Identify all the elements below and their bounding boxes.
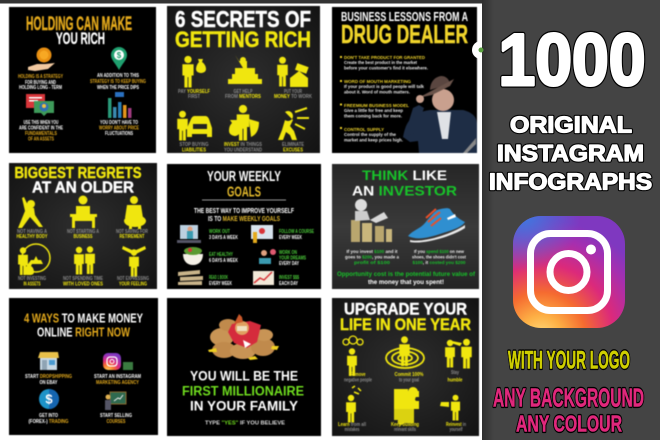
labels: upgrade bottom row: [338, 422, 466, 433]
icon: instagram logo: [513, 216, 625, 328]
heading: weekly goals: GOALS: [227, 184, 261, 200]
labels: regrets bottom row: NOT EXPRESSING: [117, 276, 149, 282]
labels: bottom row: EXCUSES: [283, 148, 304, 154]
panel grid of infographic thumbnails: [9, 6, 479, 436]
labels: upgrade top row: to your goal: [399, 378, 419, 384]
labels: top row: GET HELP: [234, 89, 253, 95]
text: dropshipping: ON EBAY: [40, 380, 58, 386]
text: lesson 2: WORD OF MOUTH MARKETING: [344, 79, 411, 85]
heading: think like: THINK LIKE: [362, 167, 447, 183]
labels: bottom row: [180, 142, 305, 154]
heading: 6 secrets: 6 SECRETS OF: [175, 6, 311, 32]
text: selling courses: COURSES: [106, 419, 126, 425]
labels: upgrade top row: Stay: [451, 370, 459, 376]
labels: upgrade bottom row: mistakes: [344, 427, 360, 433]
panel: biggest regrets at an older: [9, 163, 157, 289]
panel: 4 ways to make money online: [9, 298, 158, 435]
text: lesson 3: them coming back for more.: [344, 114, 402, 120]
labels: regrets top row: HEALTHY BODY: [16, 234, 48, 240]
text: use this when: [19, 120, 63, 142]
labels: regrets top row: RETIREMENT: [120, 234, 144, 240]
text: holding strategy: [18, 74, 63, 91]
labels: regrets top row: NOT STARTING A: [67, 229, 99, 235]
illustration: blue shoe: [408, 208, 465, 243]
text: weekly goals list: WORK ON: [279, 250, 297, 256]
title: original instagram infographs: INFOGRAPHS: [489, 168, 652, 194]
text: weekly goals list: EACH DAY: [279, 281, 298, 287]
text: use this when: USE THIS WHEN YOU: [24, 120, 59, 126]
panel: upgrade your life in one year: [332, 298, 479, 436]
illustration: figure on coins: [351, 199, 392, 242]
panel: business lessons from a drug dealer: [332, 7, 477, 153]
labels: upgrade bottom row: yourself: [450, 427, 463, 433]
labels: top row: FROM MENTORS: [225, 94, 262, 100]
text: investor explanation: [345, 249, 466, 266]
icons: bottom row: [177, 105, 309, 140]
text: forex trading: GET INTO: [39, 413, 58, 419]
labels: regrets top row: [16, 229, 148, 240]
heading: 4 ways: 4 WAYS TO MAKE MONEY: [24, 310, 143, 326]
text: first millionaire: FIRST MILLIONAIRE: [182, 384, 304, 398]
text: weekly goals list: WORK OUT: [209, 229, 230, 235]
icon: cards: [26, 94, 54, 116]
text: lesson 1: before your customer's find it elsewhere.: [344, 66, 428, 72]
labels: top row: PUT YOUR: [284, 89, 302, 95]
text: weekly goals list: FOLLOW A COURSE: [279, 229, 314, 235]
labels: upgrade top row: [344, 370, 463, 384]
icons: weekly goals: [177, 225, 276, 285]
labels: regrets bottom row: NOT SPENDING TIME: [63, 276, 104, 282]
text: lesson 2: [340, 79, 424, 96]
icons: upgrade bottom row: [346, 386, 460, 425]
text: worry about price: [99, 120, 139, 137]
text: use this when: ARE CONFIDENT IN THE: [19, 126, 63, 132]
text: investor explanation: If you spend $100 on new: [414, 249, 464, 255]
text: first millionaire: IN YOUR FAMILY: [190, 398, 298, 414]
labels: upgrade top row: negative people: [344, 378, 372, 384]
labels: bottom row: ELIMINATE: [282, 142, 305, 148]
text: lesson 1: [340, 55, 428, 72]
labels: regrets bottom row: IN ASSETS: [24, 282, 41, 288]
icon: bar chart: [108, 92, 132, 118]
text: addition to strategy: [90, 73, 146, 91]
text: investor explanation: shoes, the shoes didn't cost: [412, 254, 466, 260]
text: investor explanation: goes to $200, you made a: [345, 254, 399, 260]
text: addition to strategy: WHEN THE PRICE DIPS: [97, 85, 139, 91]
title: original instagram infographs: [489, 112, 652, 194]
illustration: man on money bags: [208, 314, 279, 360]
labels: regrets bottom row: YOUR FEELING: [119, 282, 147, 288]
text: weekly goals list: EAT HEALTHY: [209, 252, 233, 258]
subheading: best way: [194, 208, 295, 223]
text: investor explanation: $100, it costed you $200: [412, 260, 466, 266]
text: holding strategy: HOLDING LONG - TERM: [19, 85, 62, 91]
labels: upgrade bottom row: relevant skills: [394, 427, 416, 433]
subheading: best way: THE BEST WAY TO IMPROVE YOURSELF: [194, 208, 295, 215]
text: weekly goals list: EVERY WEEK: [279, 235, 302, 241]
heading: biggest regrets: [14, 165, 142, 196]
text: marketing agency: [94, 374, 141, 386]
icons: regrets bottom row: [18, 244, 146, 277]
title: original instagram infographs: ORIGINAL: [510, 112, 632, 138]
subheading: best way: IS TO MAKE WEEKLY GOALS: [208, 216, 280, 223]
panel: think like an investor: [332, 164, 479, 289]
labels: regrets top row: NOT HAVING A: [17, 229, 47, 235]
panel: 6 secrets of getting rich: [167, 6, 320, 154]
heading: upgrade: LIFE IN ONE YEAR: [340, 316, 471, 334]
text: lesson 4: [340, 127, 403, 144]
text: lesson 3: Give a little for free and keep: [344, 108, 403, 114]
panel: your weekly goals: [167, 164, 321, 289]
text: opportunity cost: [337, 271, 476, 286]
heading: business lessons: [341, 10, 468, 49]
labels: top row: PAY YOURSELF: [178, 89, 210, 95]
text: type yes: TYPE "YES" IF YOU BELIEVE: [205, 420, 285, 426]
right column background: [482, 0, 660, 440]
title: original instagram infographs: ORIGINAL: [510, 112, 632, 138]
heading: upgrade: [340, 300, 471, 334]
panel: first millionaire: [167, 298, 321, 436]
heading: 6 secrets: [175, 6, 311, 52]
text: investor explanation: profit of $100: [354, 260, 390, 266]
text: weekly goals list: 6 DAYS A WEEK: [209, 258, 238, 264]
text: worry about price: YOU DON'T HAVE TO: [100, 120, 138, 126]
text: lesson 4: CONTROL SUPPLY: [344, 127, 385, 133]
icon: shop: [38, 352, 59, 370]
text: weekly goals list: YOUR DREAMS: [279, 256, 306, 262]
heading: think like: AN INVESTOR: [352, 182, 457, 198]
text: lesson 4: Control the supply of the: [344, 132, 396, 138]
text: dropshipping: [25, 374, 72, 386]
heading: 4 ways: [24, 310, 143, 340]
icon: location pin: $: [117, 51, 122, 60]
icon: forex coin: [39, 389, 59, 409]
heading: holding: [26, 14, 132, 48]
heading: 6 secrets: GETTING RICH: [175, 27, 311, 52]
illustration: man in hat: [403, 76, 477, 153]
text: weekly goals list: EVERY DAY: [279, 261, 299, 267]
panel: holding can make you rich: [9, 7, 156, 153]
labels: regrets bottom row: [18, 276, 149, 288]
labels: top row: MONEY TO WORK: [274, 94, 312, 100]
text: weekly goals list: INVEST $$$: [279, 275, 299, 281]
heading: biggest regrets: BIGGEST REGRETS: [14, 165, 142, 182]
text: worry about price: FLUCTUATIONS: [105, 131, 133, 137]
labels: top row: FIRST: [188, 94, 200, 100]
text: forex trading: [28, 413, 69, 425]
labels: bottom row: INVEST IN THINGS: [224, 142, 263, 148]
labels: upgrade bottom row: Reinvest in: [446, 422, 466, 428]
icon: location pin: [111, 47, 127, 70]
text: holding strategy: HOLDING IS A STRATEGY: [18, 74, 63, 80]
icon: instagram agency: [103, 353, 133, 370]
heading: biggest regrets: AT AN OLDER: [32, 180, 134, 196]
text: weekly goals list: 3 DAYS A WEEK: [209, 235, 238, 241]
text: weekly goals list: EVERY WEEK: [209, 281, 232, 287]
heading: holding: YOU RICH: [56, 29, 105, 48]
heading: business lessons: BUSINESS LESSONS FROM A: [341, 10, 468, 24]
text: selling courses: [100, 413, 132, 425]
labels: upgrade top row: Remove: [350, 372, 366, 378]
heading: weekly goals: [207, 168, 281, 200]
text: lesson 3: FREEMIUM BUSINESS MODEL: [344, 103, 409, 109]
heading: weekly goals: YOUR WEEKLY: [207, 168, 281, 185]
title: original instagram infographs: INFOGRAPHS: [489, 168, 652, 194]
labels: bottom row: LIABILITIES: [182, 148, 207, 154]
icon: coin in hand: [28, 48, 55, 71]
labels: upgrade bottom row: Learn from all: [338, 422, 367, 428]
heading: business lessons: DRUG DEALER: [341, 19, 468, 49]
text: lesson 3: [340, 103, 409, 120]
text: lesson 2: about it. Word of mouth matters.: [344, 90, 410, 96]
labels: upgrade top row: humble: [448, 378, 463, 384]
labels: top row: [178, 89, 312, 100]
big number 1000: 1000: [498, 20, 646, 101]
heading: think like: [352, 167, 457, 198]
labels: upgrade bottom row: Keep building: [391, 422, 419, 428]
carousel button green dot: [478, 48, 484, 52]
top dark strip: [0, 0, 482, 4]
text: selling courses: START SELLING: [100, 413, 132, 419]
text: weekly goals list: READ 1 BOOK: [209, 275, 228, 281]
labels: regrets bottom row: NOT INVESTING: [18, 276, 46, 282]
text: worry about price: WORRY ABOUT PRICE: [99, 126, 139, 132]
title: original instagram infographs: INSTAGRAM: [497, 140, 644, 166]
heading: 4 ways: ONLINE RIGHT NOW: [37, 324, 131, 340]
text: use this when: OF AN ASSETS: [28, 136, 54, 142]
labels: bottom row: YOU UNDERSTAND: [224, 148, 262, 154]
text: weekly goals list: [209, 229, 314, 287]
text: lesson 1: DON'T TAKE PRODUCT FOR GRANTED: [344, 55, 425, 61]
text: lesson 4: market and keep prices high.: [344, 138, 403, 144]
heading: upgrade: UPGRADE YOUR: [344, 300, 467, 318]
text: first millionaire: YOU WILL BE THE: [190, 368, 298, 384]
icons: upgrade top row: [343, 336, 472, 376]
text: investor explanation: If you invest $100 and it: [346, 249, 398, 255]
labels: regrets top row: NOT SAVING FOR: [116, 229, 148, 235]
title: original instagram infographs: INSTAGRAM: [497, 140, 644, 166]
big number 1000: 1000: [498, 20, 646, 101]
text: marketing agency: MARKETING AGENCY: [96, 380, 140, 386]
text: holding strategy: FOR BUYING AND: [25, 80, 56, 86]
labels: bottom row: STOP BUYING: [180, 142, 209, 148]
labels: regrets top row: BUSINESS: [74, 234, 93, 240]
text: use this when: FUNDAMENTALS: [25, 131, 58, 137]
labels: regrets bottom row: WITH LOVED ONES: [63, 282, 104, 288]
text: addition to strategy: STRATEGY IS TO KEEP BUYING: [90, 79, 146, 85]
text: marketing agency: START AN INSTAGRAM: [94, 374, 141, 380]
icons: top row: [182, 55, 309, 88]
icon: forex coin: $: [45, 392, 53, 406]
text: addition to strategy: AN ADDITION TO THIS: [97, 73, 140, 79]
text: lesson 2: If your product is good people will talk: [344, 84, 424, 90]
text: first millionaire: [182, 368, 304, 414]
text: dropshipping: START DROPSHIPPING: [25, 374, 72, 380]
text: opportunity cost: the money that you spent!: [368, 279, 444, 286]
icons: regrets top row: [18, 196, 146, 229]
icon: teacher: [105, 392, 126, 410]
text: forex trading: (FOREX-) TRADING: [28, 419, 69, 425]
text: any background any colour: [493, 382, 644, 436]
carousel arrow button: [472, 41, 490, 59]
text: lesson 1: Create the best product in the market: [344, 60, 417, 66]
labels: upgrade top row: Commit 100%: [394, 372, 424, 378]
heading: holding: HOLDING CAN MAKE: [26, 14, 132, 35]
text: opportunity cost: Opportunity cost is the potential future value of: [337, 271, 476, 278]
